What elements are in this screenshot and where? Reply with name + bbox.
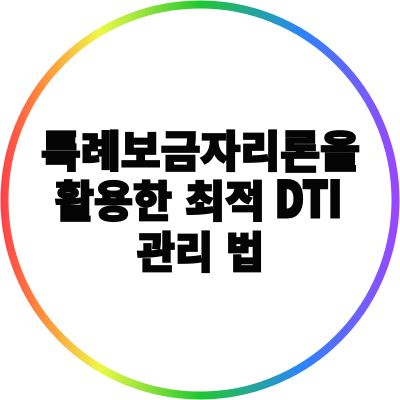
title bbox=[41, 118, 360, 281]
title line 2: DTI bbox=[275, 161, 342, 232]
title line 2: 활용한 bbox=[55, 168, 172, 230]
title line 3: 법 bbox=[226, 219, 264, 281]
title line 2 bbox=[55, 161, 342, 232]
title line 3 bbox=[137, 219, 264, 281]
title line 2: 최적 bbox=[185, 168, 265, 230]
title line 1: 특례보금자리론을 bbox=[41, 118, 360, 180]
title line 3: 관리 bbox=[137, 219, 213, 281]
